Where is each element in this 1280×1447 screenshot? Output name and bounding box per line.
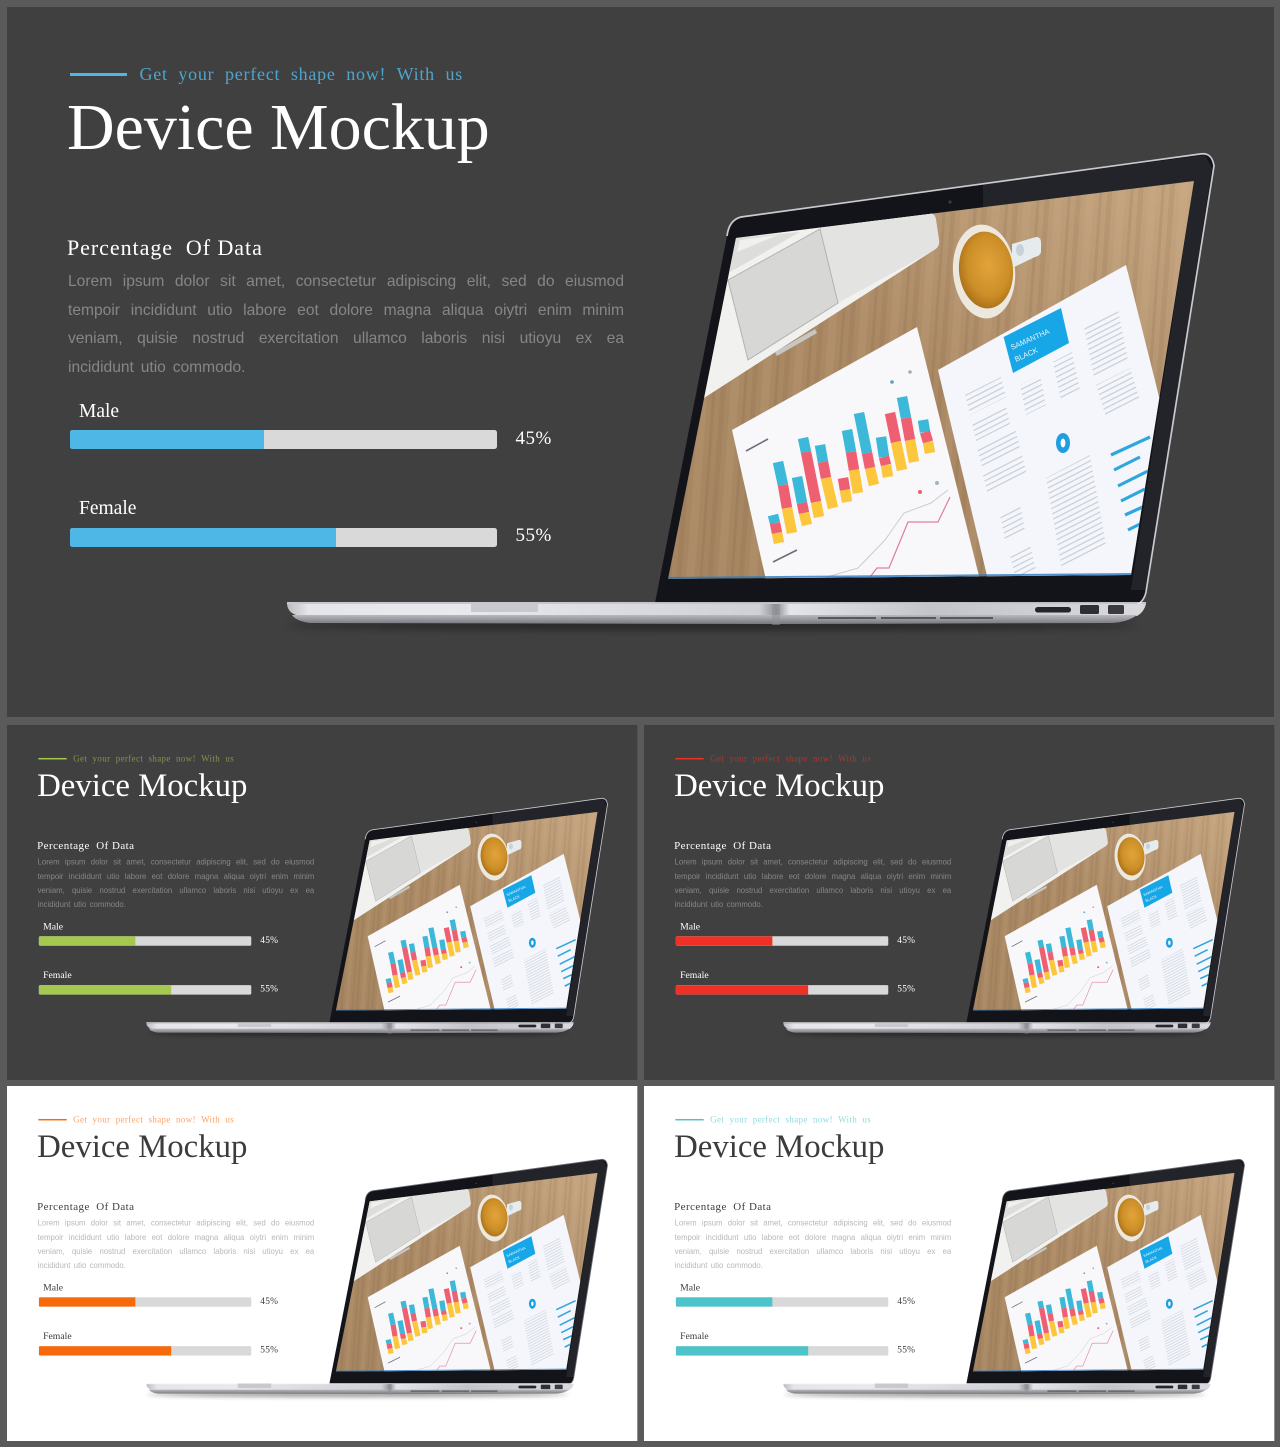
title: Device Mockup: [674, 767, 884, 803]
laptop mockup: BLACK: [1013, 346, 1039, 364]
value: 45%: 45%: [897, 935, 915, 946]
body text: [37, 858, 314, 909]
progress bar: female 55%: [675, 1346, 888, 1355]
section heading: Percentage Of Data: [37, 1200, 134, 1212]
body text: Lorem ipsum dolor sit amet, consectetur adipiscing elit, sed do eiusmod: [37, 858, 314, 866]
body text: [674, 1219, 952, 1270]
body text: [37, 1219, 314, 1270]
laptop mockup: SAMANTHA: [505, 1246, 526, 1258]
body text: veniam, quisie nostrud exercitation ullamco laboris nisi utioyu ex ea: [674, 1247, 951, 1256]
progress bar: female 55%: [675, 985, 888, 994]
progress bar: female 55%: [70, 528, 497, 546]
laptop mockup: [146, 1158, 608, 1400]
laptop mockup: BLACK: [1144, 1255, 1157, 1264]
label: male: Male: [43, 1283, 63, 1293]
body text: tempoir incididunt utio labore eot dolore magna aliqua oiytri enim minim: [68, 302, 624, 318]
tagline: Get your perfect shape now! With us: [73, 1114, 234, 1124]
laptop mockup: SAMANTHA: [1142, 885, 1163, 897]
tagline: Get your perfect shape now! With us: [140, 64, 463, 84]
title: Device Mockup: [674, 1128, 884, 1164]
label: male: Male: [680, 1283, 700, 1293]
body text: incididunt utio commodo.: [674, 1262, 762, 1270]
progress bar: female 55%: [38, 1346, 251, 1355]
value: 45%: 45%: [897, 1296, 915, 1307]
tagline: Get your perfect shape now! With us: [710, 1114, 871, 1124]
value: 55%: 55%: [897, 984, 915, 994]
label: female: Female: [680, 970, 708, 981]
label: female: Female: [680, 1331, 708, 1342]
laptop mockup: [287, 152, 1215, 632]
laptop mockup: BLACK: [1144, 894, 1157, 903]
body text: incididunt utio commodo.: [68, 358, 246, 376]
body text: [674, 858, 952, 909]
laptop mockup: SAMANTHA: [1009, 327, 1050, 352]
body text: [68, 273, 624, 376]
title: Device Mockup: [37, 767, 247, 803]
progress bar: male 45%: [675, 936, 888, 945]
panel: dark slide (green): [6, 725, 637, 1080]
laptop mockup: BLACK: [507, 1255, 520, 1264]
body text: incididunt utio commodo.: [674, 901, 762, 909]
laptop mockup: [783, 1158, 1245, 1400]
body text: Lorem ipsum dolor sit amet, consectetur adipiscing elit, sed do eiusmod: [37, 1219, 314, 1227]
value: 45%: 45%: [516, 428, 552, 449]
body text: Lorem ipsum dolor sit amet, consectetur adipiscing elit, sed do eiusmod: [68, 273, 624, 290]
value: 55%: 55%: [260, 984, 278, 994]
body text: tempoir incididunt utio labore eot dolore magna aliqua oiytri enim minim: [674, 1233, 951, 1242]
label: male: Male: [680, 922, 700, 932]
body text: incididunt utio commodo.: [37, 901, 125, 909]
progress bar: male 45%: [675, 1297, 888, 1306]
accent rule: [675, 758, 703, 759]
body text: tempoir incididunt utio labore eot dolore magna aliqua oiytri enim minim: [674, 872, 951, 881]
body text: veniam, quisie nostrud exercitation ullamco laboris nisi utioyu ex ea: [37, 886, 314, 895]
tagline: Get your perfect shape now! With us: [73, 753, 234, 763]
value: 55%: 55%: [260, 1345, 278, 1355]
progress bar: male 45%: [38, 1297, 251, 1306]
body text: Lorem ipsum dolor sit amet, consectetur adipiscing elit, sed do eiusmod: [674, 1219, 951, 1227]
value: 45%: 45%: [260, 1296, 278, 1307]
tagline: Get your perfect shape now! With us: [710, 753, 871, 763]
laptop mockup: SAMANTHA: [505, 885, 526, 897]
title: Device Mockup: [67, 90, 490, 164]
body text: Lorem ipsum dolor sit amet, consectetur adipiscing elit, sed do eiusmod: [674, 858, 951, 866]
body text: tempoir incididunt utio labore eot dolore magna aliqua oiytri enim minim: [37, 872, 314, 881]
label: male: Male: [79, 401, 119, 422]
section heading: Percentage Of Data: [674, 839, 771, 851]
value: 55%: 55%: [897, 1345, 915, 1355]
panel: dark slide (red): [644, 725, 1274, 1080]
accent rule: [675, 1119, 703, 1120]
label: female: Female: [43, 1331, 71, 1342]
progress bar: female 55%: [38, 985, 251, 994]
panel: light slide (orange): [6, 1086, 637, 1441]
section heading: Percentage Of Data: [67, 235, 263, 260]
progress bar: male 45%: [70, 430, 497, 448]
progress bar: male 45%: [38, 936, 251, 945]
body text: veniam, quisie nostrud exercitation ullamco laboris nisi utioyu ex ea: [674, 886, 951, 895]
body text: veniam, quisie nostrud exercitation ullamco laboris nisi utioyu ex ea: [68, 330, 624, 347]
label: female: Female: [79, 498, 136, 519]
accent rule: [38, 1119, 66, 1120]
laptop mockup: SAMANTHA: [1142, 1246, 1163, 1258]
panel: main dark slide (blue): [6, 7, 1274, 717]
accent rule: [70, 73, 126, 76]
panel: light slide (teal): [644, 1086, 1274, 1441]
title: Device Mockup: [37, 1128, 247, 1164]
body text: veniam, quisie nostrud exercitation ullamco laboris nisi utioyu ex ea: [37, 1247, 314, 1256]
accent rule: [38, 758, 66, 759]
body text: tempoir incididunt utio labore eot dolore magna aliqua oiytri enim minim: [37, 1233, 314, 1242]
value: 55%: 55%: [516, 525, 552, 546]
value: 45%: 45%: [260, 935, 278, 946]
laptop mockup: [146, 798, 608, 1037]
section heading: Percentage Of Data: [674, 1200, 771, 1212]
section heading: Percentage Of Data: [37, 839, 134, 851]
laptop mockup: [783, 798, 1245, 1037]
laptop mockup: BLACK: [507, 894, 520, 903]
label: male: Male: [43, 922, 63, 932]
body text: incididunt utio commodo.: [37, 1262, 125, 1270]
label: female: Female: [43, 970, 71, 981]
